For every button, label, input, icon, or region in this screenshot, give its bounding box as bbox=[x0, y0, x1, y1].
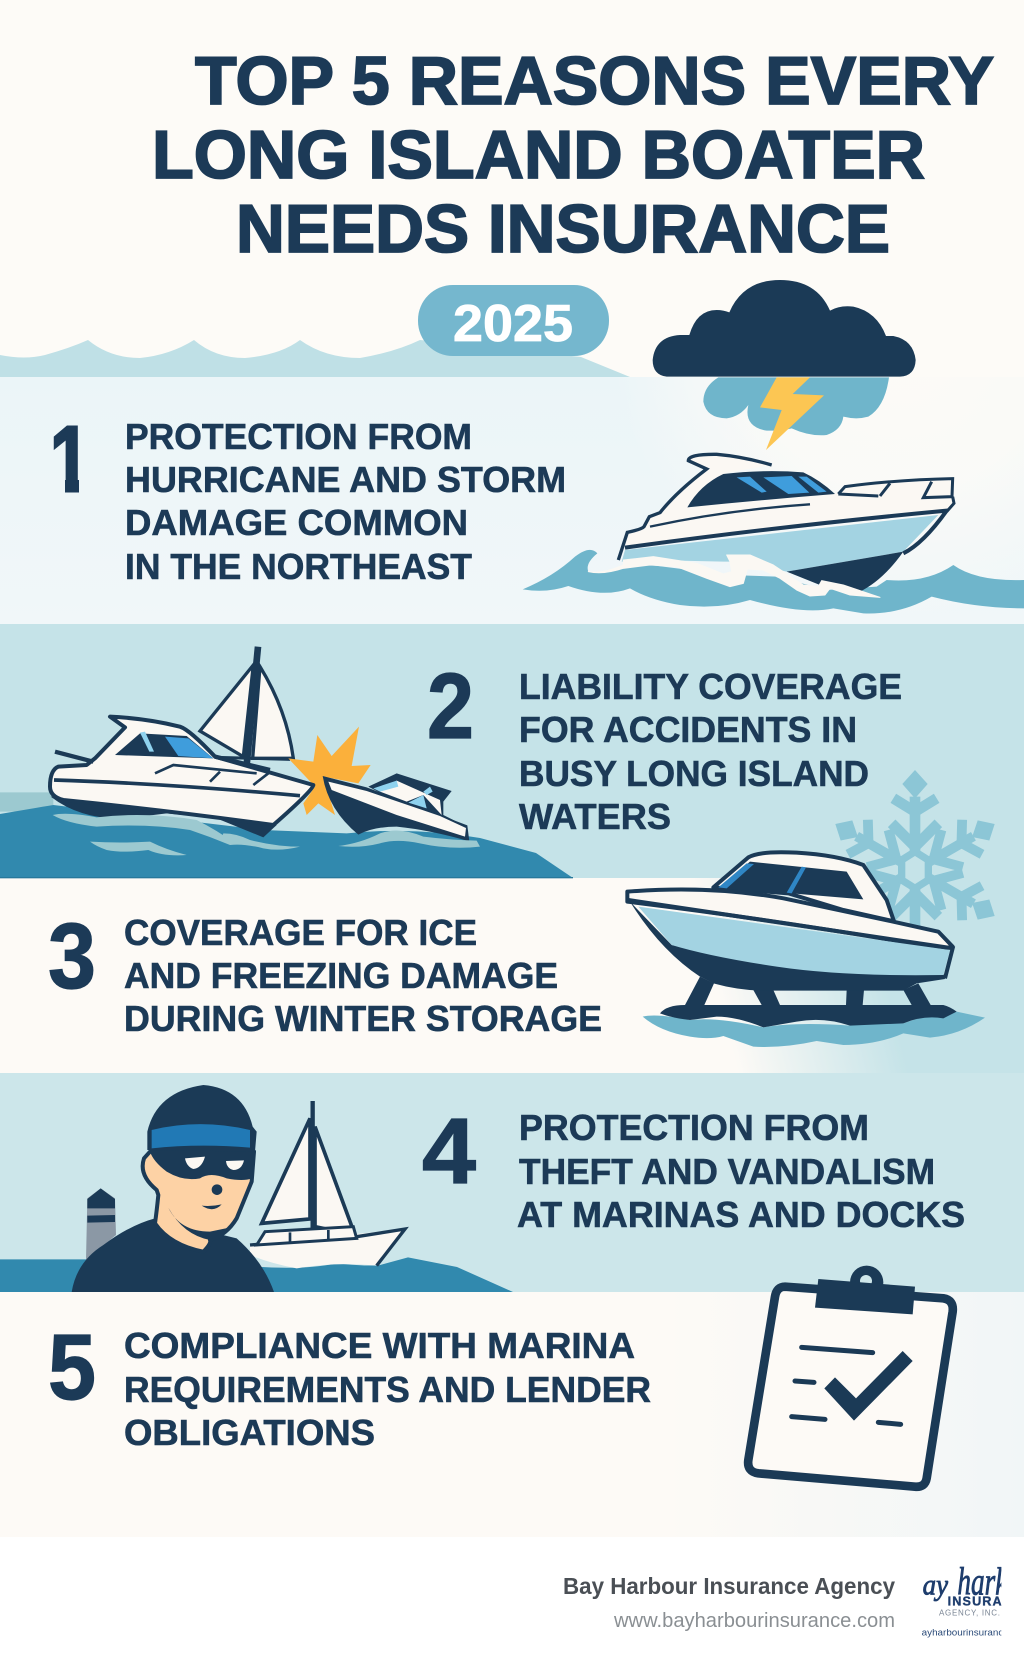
icon: speedboat bbox=[618, 454, 954, 592]
reason 4 text bbox=[517, 1107, 965, 1235]
wave band under title bbox=[0, 340, 630, 377]
logo: INSURA bbox=[948, 1595, 1002, 1609]
illustration: storm cloud and speedboat bbox=[523, 280, 1024, 613]
reason 5 text bbox=[124, 1325, 651, 1453]
icon: large motorboat bbox=[50, 717, 313, 837]
title: TOP 5 REASONS EVERY bbox=[195, 43, 994, 119]
icon: waves bbox=[523, 550, 1024, 613]
logo: ayharbourinsuranc bbox=[922, 1628, 1004, 1638]
year badge: 2025 bbox=[453, 295, 573, 353]
reason 5 text: REQUIREMENTS AND LENDER bbox=[124, 1369, 651, 1410]
reason 1 text: HURRICANE AND STORM bbox=[125, 459, 566, 500]
title bbox=[152, 43, 994, 267]
reason 1 text: PROTECTION FROM bbox=[125, 416, 472, 457]
year badge bbox=[418, 285, 609, 356]
reason 4 text: PROTECTION FROM bbox=[519, 1107, 869, 1148]
icon: sailboat bbox=[250, 1101, 405, 1268]
reason 3 text: DURING WINTER STORAGE bbox=[124, 998, 602, 1039]
icon: snowflake bbox=[825, 770, 1005, 943]
panel: reason 3 background bbox=[0, 878, 1024, 1073]
icon: lightning bolt bbox=[760, 377, 824, 450]
reason 1 number: 1 bbox=[50, 407, 90, 511]
water bbox=[0, 1257, 513, 1292]
water bbox=[0, 792, 573, 878]
reason 2 text: WATERS bbox=[519, 796, 671, 837]
reason 2 text: LIABILITY COVERAGE bbox=[519, 666, 902, 707]
storm glow bbox=[600, 340, 1024, 620]
reason 3 text: COVERAGE FOR ICE bbox=[124, 912, 477, 953]
reason 2 text bbox=[519, 666, 902, 837]
page background bbox=[0, 0, 1024, 378]
reason 3 number: 3 bbox=[48, 904, 96, 1008]
icon: clipboard with checkmark bbox=[748, 1266, 953, 1487]
footer: agency name: Bay Harbour Insurance Agency bbox=[563, 1573, 895, 1599]
water highlights bbox=[53, 814, 480, 855]
icon: stands and base bbox=[660, 977, 957, 1027]
panel: reason 4 background bbox=[0, 1073, 1024, 1292]
logo: AGENCY, INC. bbox=[939, 1609, 1000, 1618]
icon: collision burst bbox=[288, 727, 371, 815]
title: LONG ISLAND BOATER bbox=[152, 117, 925, 193]
icon: lighthouse bbox=[86, 1188, 116, 1260]
icon: small motorboat bbox=[323, 773, 469, 841]
reason 5 text: OBLIGATIONS bbox=[124, 1412, 375, 1453]
panel: reason 1 background bbox=[0, 377, 1024, 624]
panel: reason 2 background bbox=[0, 624, 1024, 878]
icon: water under stands bbox=[643, 1012, 985, 1047]
reason 3 text: AND FREEZING DAMAGE bbox=[124, 955, 558, 996]
panel: reason 5 background bbox=[0, 1292, 1024, 1537]
logo: ay bbox=[923, 1568, 949, 1601]
icon: pale rain cloud bbox=[703, 377, 889, 435]
icon: dark storm cloud bbox=[653, 280, 916, 377]
footer background bbox=[0, 1537, 1024, 1666]
illustration: boat on winter stands bbox=[627, 852, 985, 1047]
title: NEEDS INSURANCE bbox=[236, 191, 890, 267]
footer: website: www.bayharbourinsurance.com bbox=[613, 1610, 895, 1632]
logo bbox=[922, 1566, 1002, 1638]
reason 1 text bbox=[125, 416, 566, 587]
reason 4 text: THEFT AND VANDALISM bbox=[519, 1151, 935, 1192]
reason 5 number: 5 bbox=[48, 1315, 96, 1419]
reason 4 text: AT MARINAS AND DOCKS bbox=[517, 1194, 965, 1235]
illustration: thief at marina bbox=[0, 1085, 513, 1292]
icon: sailboat bbox=[200, 647, 293, 765]
illustration: boat collision bbox=[0, 647, 573, 878]
reason 1 text: IN THE NORTHEAST bbox=[125, 546, 472, 587]
reason 4 number: 4 bbox=[422, 1099, 476, 1203]
reason 2 text: BUSY LONG ISLAND bbox=[519, 753, 869, 794]
reason 3 text bbox=[124, 912, 602, 1039]
icon: boat hull and cabin bbox=[627, 852, 953, 991]
reason 2 text: FOR ACCIDENTS IN bbox=[519, 709, 857, 750]
icon: thief bbox=[72, 1085, 274, 1292]
reason 1 text: DAMAGE COMMON bbox=[125, 502, 468, 543]
icon: white wake bbox=[588, 555, 880, 597]
reason 2 number: 2 bbox=[427, 654, 474, 758]
reason 5 text: COMPLIANCE WITH MARINA bbox=[124, 1325, 635, 1366]
